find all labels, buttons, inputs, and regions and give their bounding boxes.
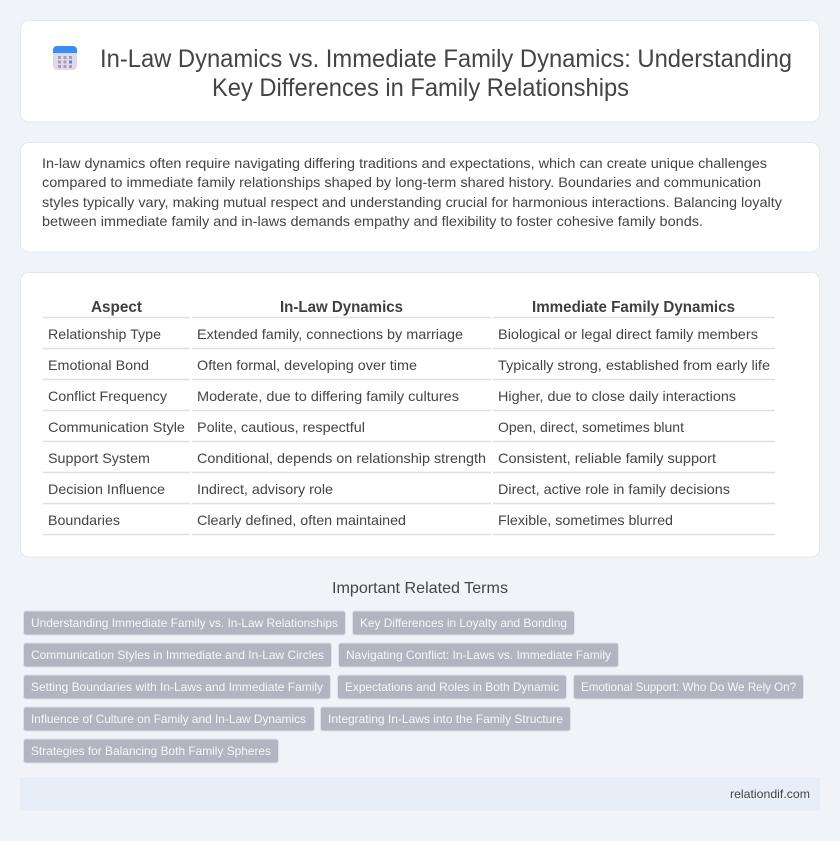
row: communication style: Communication Style [48, 419, 185, 435]
row: boundaries: Flexible, sometimes blurred [498, 512, 673, 528]
row: relationship type: Biological or legal direct family members [498, 326, 758, 342]
intro paragraph [42, 155, 782, 229]
row: emotional bond [48, 357, 770, 373]
title: In-Law Dynamics vs. Immediate Family Dynamics: Understanding [100, 45, 792, 73]
tag: Understanding Immediate Family vs. In-Law Relationships [31, 616, 338, 630]
title: Key Differences in Family Relationships [212, 74, 629, 102]
table header row: Immediate Family Dynamics [532, 299, 735, 316]
row: emotional bond: Often formal, developing over time [197, 357, 417, 373]
tag: Communication Styles in Immediate and In-Law Circles [31, 648, 324, 662]
tag: Integrating In-Laws into the Family Structure [328, 712, 563, 726]
row: boundaries [48, 512, 673, 528]
row: boundaries: Clearly defined, often maintained [197, 512, 406, 528]
tag: Setting Boundaries with In-Laws and Immediate Family [31, 680, 323, 694]
row: support system: Support System [48, 450, 150, 466]
row: decision influence: Decision Influence [48, 481, 165, 497]
tag [24, 675, 330, 699]
tag: Expectations and Roles in Both Dynamic [345, 680, 559, 694]
row: decision influence [48, 481, 730, 497]
row: communication style [48, 419, 684, 435]
tag [352, 611, 574, 635]
panel: introduction [20, 142, 820, 252]
footer bar [20, 777, 820, 811]
row: support system: Consistent, reliable family support [498, 450, 716, 466]
tag [338, 643, 618, 667]
row: conflict frequency: Higher, due to close daily interactions [498, 388, 736, 404]
row: communication style: Open, direct, sometimes blunt [498, 419, 684, 435]
panel: header [20, 20, 820, 122]
intro paragraph: compared to immediate family relationships shaped by long-term shared history. Boundaries and communication [42, 174, 761, 190]
tag [24, 611, 346, 635]
icon: calendar [53, 46, 77, 70]
row: emotional bond: Emotional Bond [48, 357, 149, 373]
row: support system [48, 450, 716, 466]
tag: Strategies for Balancing Both Family Spheres [31, 744, 271, 758]
tag [574, 675, 804, 699]
intro paragraph: styles typically vary, making mutual respect and understanding crucial for harmonious interactions. Balancing loyalty [42, 194, 782, 210]
tag: Key Differences in Loyalty and Bonding [360, 616, 567, 630]
tag [24, 707, 314, 731]
row: decision influence: Indirect, advisory role [197, 481, 333, 497]
panel: comparison table [20, 272, 820, 557]
tag [338, 675, 566, 699]
tag: Navigating Conflict: In-Laws vs. Immediate Family [346, 648, 611, 662]
row: support system: Conditional, depends on relationship strength [197, 450, 486, 466]
tag [320, 707, 570, 731]
table header row: Aspect [91, 299, 143, 316]
tag: Emotional Support: Who Do We Rely On? [581, 680, 796, 694]
row: relationship type: Extended family, connections by marriage [197, 326, 463, 342]
row: emotional bond: Typically strong, established from early life [498, 357, 770, 373]
row: decision influence: Direct, active role in family decisions [498, 481, 730, 497]
row: communication style: Polite, cautious, respectful [197, 419, 365, 435]
intro paragraph: In-law dynamics often require navigating differing traditions and expectations, which can create unique challenges [42, 155, 767, 171]
tag [24, 739, 278, 763]
title [100, 45, 792, 102]
tag [24, 643, 332, 667]
table header row: In-Law Dynamics [280, 299, 403, 316]
related term tags [24, 611, 804, 763]
heading: related terms: Important Related Terms [332, 580, 508, 597]
row: boundaries: Boundaries [48, 512, 120, 528]
row: conflict frequency: Conflict Frequency [48, 388, 167, 404]
intro paragraph: between immediate family and in-laws demands empathy and flexibility to foster cohesive family bonds. [42, 213, 703, 229]
footer bar: relationdif.com [730, 787, 810, 801]
row: relationship type: Relationship Type [48, 326, 161, 342]
row: relationship type [48, 326, 758, 342]
row: conflict frequency: Moderate, due to differing family cultures [197, 388, 459, 404]
tag: Influence of Culture on Family and In-Law Dynamics [31, 712, 306, 726]
row: conflict frequency [48, 388, 736, 404]
table header row [91, 299, 735, 316]
